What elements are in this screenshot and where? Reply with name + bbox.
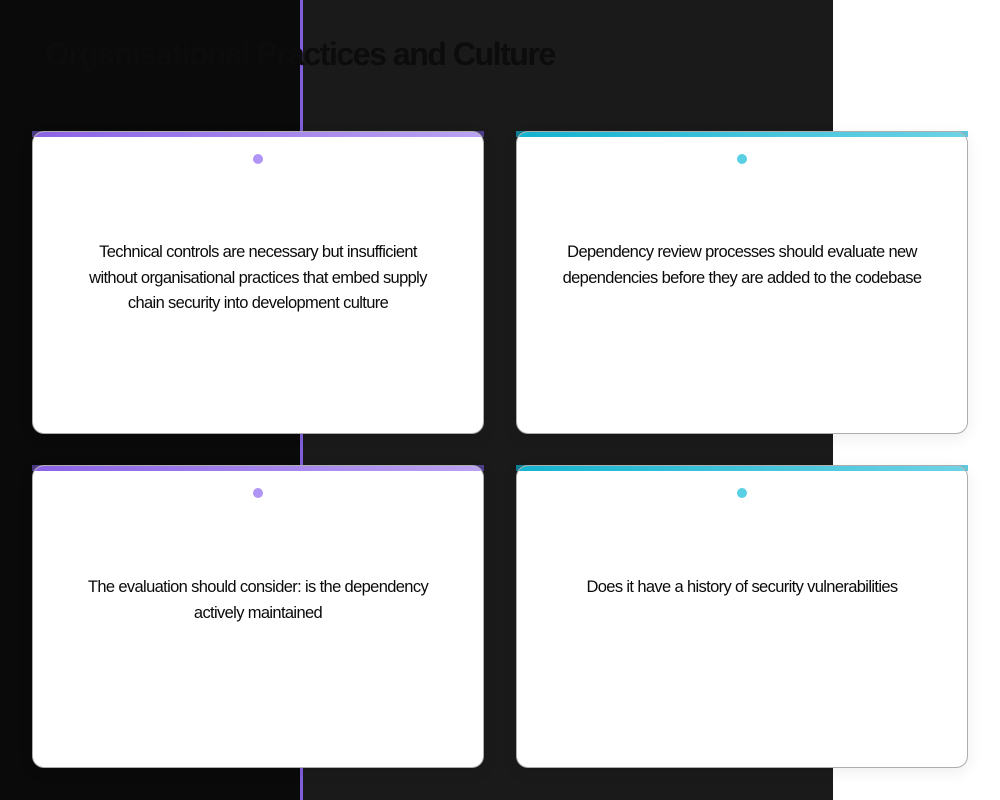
text: technical controls: chain security into development culture	[128, 294, 388, 312]
text: dependency review: dependencies before they are added to the codebase	[563, 268, 921, 286]
text: technical controls: Technical controls are necessary but insufficient	[99, 243, 417, 261]
panel: dependency review	[516, 131, 968, 438]
text: evaluation criteria: actively maintained	[194, 604, 322, 622]
text: technical controls: without organisational practices that embed supply	[89, 268, 427, 286]
panel: vulnerability history	[516, 465, 968, 772]
panel: technical controls	[32, 131, 484, 437]
background: dark left band	[0, 0, 300, 800]
text: technical controls	[89, 243, 428, 312]
icon: teal dot	[737, 154, 747, 164]
icon: purple dot	[253, 154, 263, 164]
icon: teal dot	[737, 488, 747, 498]
text: evaluation criteria	[88, 578, 429, 622]
text: vulnerability history: Does it have a history of security vulnerabilities	[586, 578, 898, 596]
icon: purple dot	[253, 488, 263, 498]
vertical purple accent line	[300, 0, 303, 800]
background: dark right band	[303, 0, 833, 800]
text: evaluation criteria: The evaluation should consider: is the dependency	[88, 578, 428, 596]
text: dependency review	[563, 243, 922, 286]
title: Organisational Practices and Culture	[45, 36, 555, 72]
text: dependency review: Dependency review processes should evaluate new	[567, 243, 917, 261]
panel: evaluation criteria	[32, 465, 484, 771]
